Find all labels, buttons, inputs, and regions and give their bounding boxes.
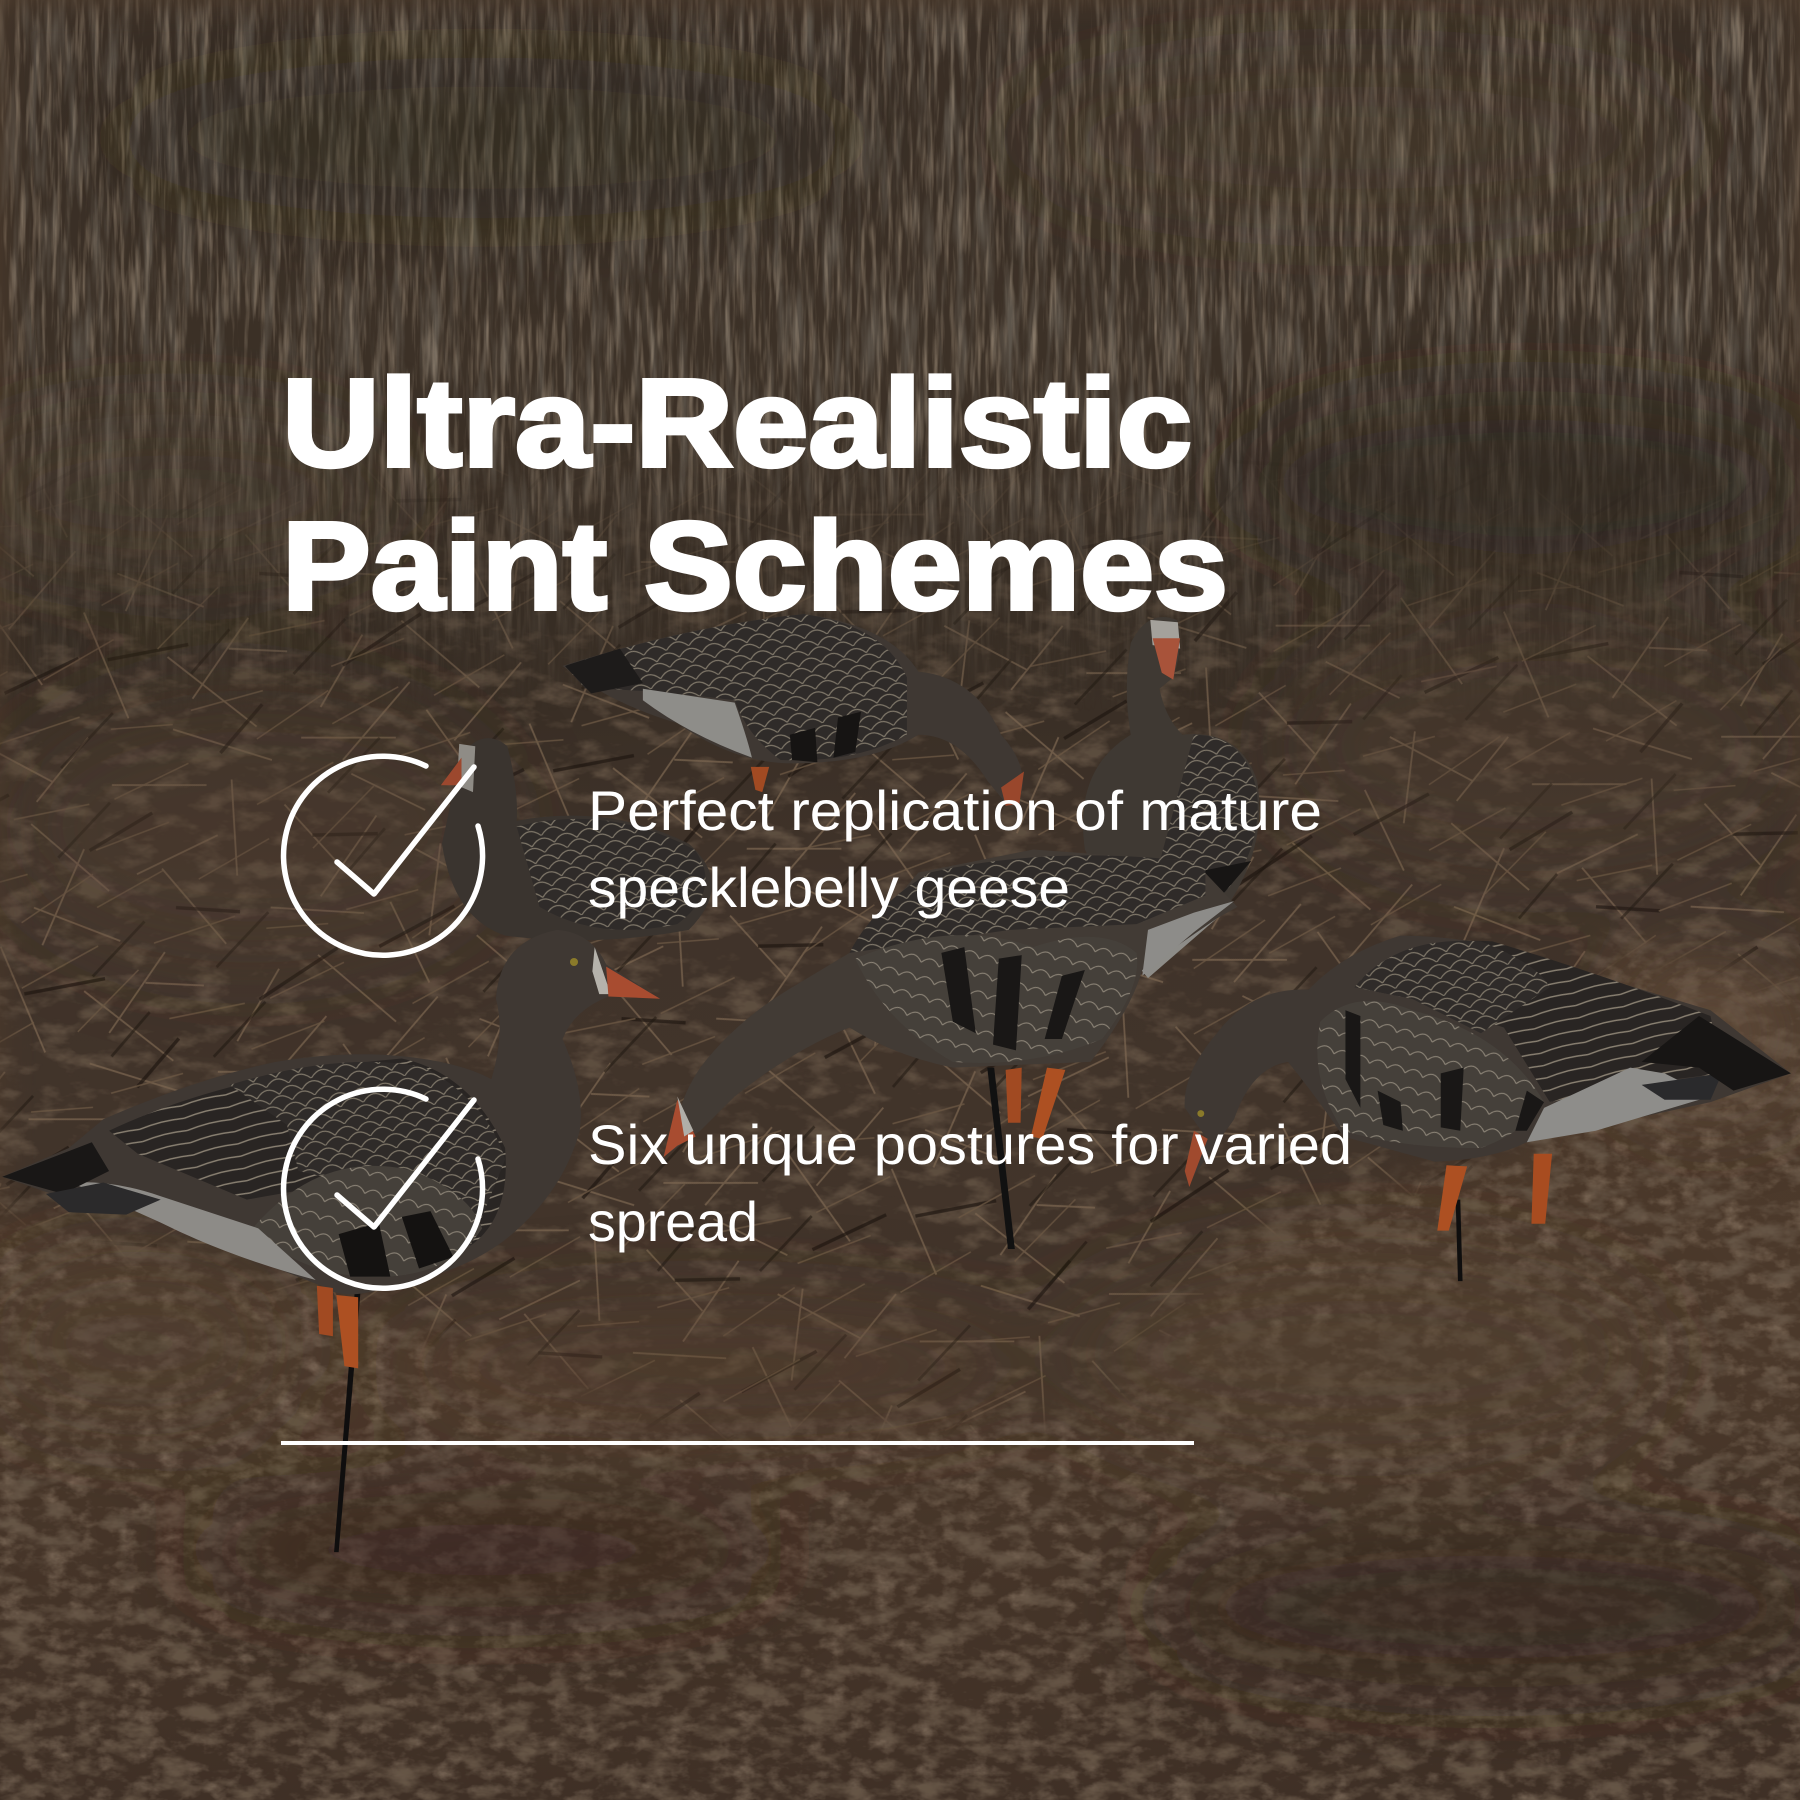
title line 2: Paint Schemes xyxy=(282,497,1228,636)
goose: right feeding xyxy=(1185,936,1791,1281)
feature text: spread xyxy=(588,1190,758,1253)
feature text xyxy=(588,1113,1352,1253)
goose: upright right xyxy=(1083,617,1259,978)
feature text: Perfect replication of mature xyxy=(588,779,1322,842)
title line 1: Ultra-Realistic xyxy=(282,354,1192,493)
divider rule xyxy=(281,1441,1194,1445)
goose: bottom left standing xyxy=(2,930,660,1552)
feature text: Six unique postures for varied xyxy=(588,1113,1352,1176)
goose: top centre feeding xyxy=(563,614,1024,806)
feature 1 xyxy=(284,756,1322,955)
feature text xyxy=(588,779,1322,919)
feature text: specklebelly geese xyxy=(588,856,1070,919)
icon: check in circle xyxy=(284,756,483,955)
goose: centre feeding xyxy=(660,850,1238,1249)
goose: small left, behind check icon xyxy=(441,738,712,940)
icon: check in circle xyxy=(284,1089,483,1288)
feature 2 xyxy=(284,1089,1352,1288)
title xyxy=(282,354,1228,636)
